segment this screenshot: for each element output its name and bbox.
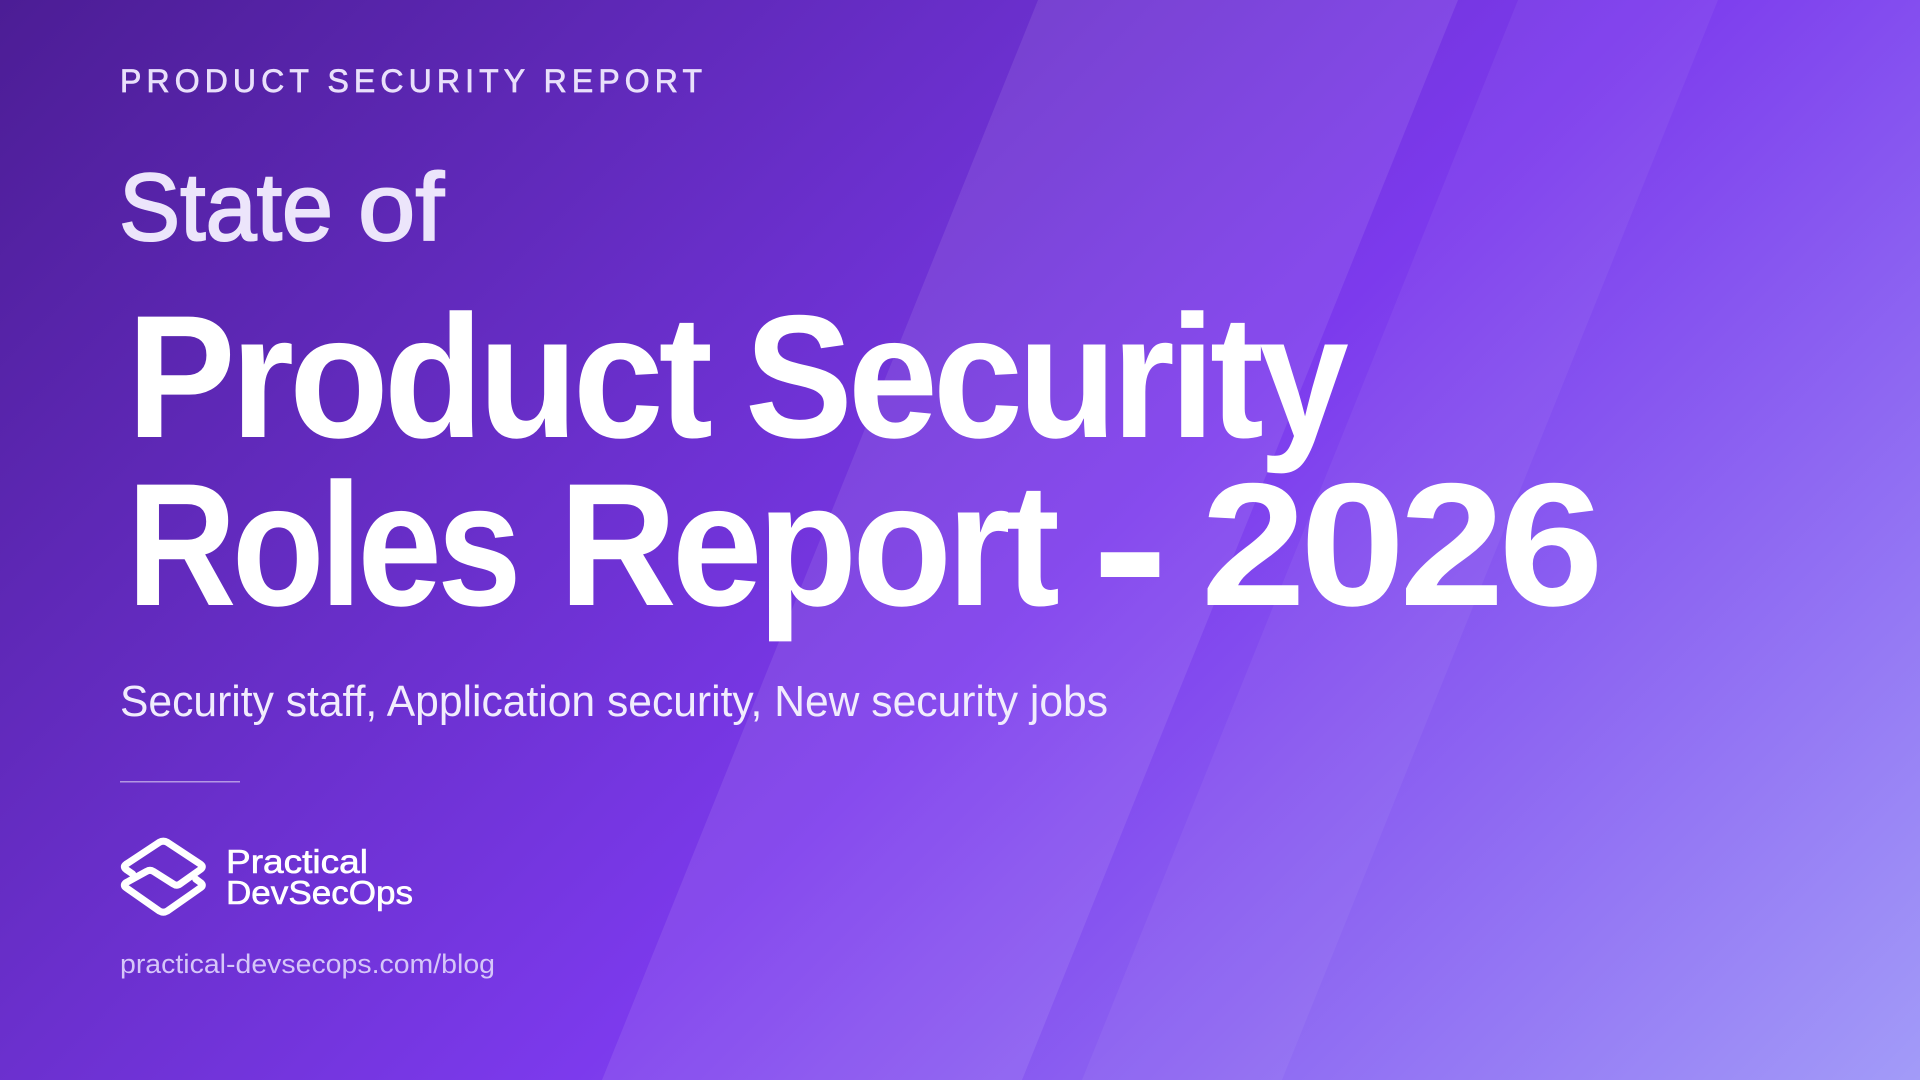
website url: practical-devsecops.com/blog [120,949,495,979]
title year: 2026 [1201,448,1598,643]
divider [120,781,240,782]
brand name: DevSecOps: DevSecOps [226,874,413,911]
eyebrow label: PRODUCT SECURITY REPORT [120,63,702,99]
background band: wide diagonal [602,0,1458,1080]
title word: Roles: Roles [127,448,517,643]
main title [127,280,1598,648]
title word: Report: Report [559,448,1059,643]
title word: Product: Product [127,280,712,475]
heading word: of: of [358,154,444,261]
brand logo [124,841,413,912]
heading: State of [119,154,444,261]
brand name: Practical: Practical [226,843,368,880]
subtitle: Security staff, Application security, New security jobs [120,677,1108,726]
title word: Security: Security [745,280,1349,475]
heading word: State: State [119,154,333,261]
title dash: - [1095,453,1159,648]
icon: stacked diamonds [124,841,202,912]
background band: narrow diagonal [1082,0,1718,1080]
